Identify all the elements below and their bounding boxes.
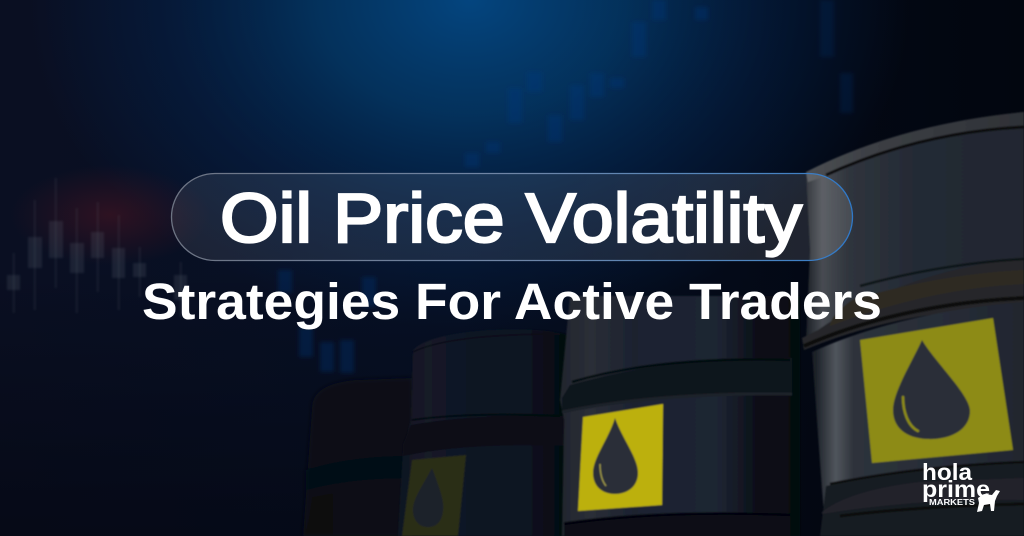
icon: label with oil drop small barrel [402,455,466,536]
title: Oil Price Volatility [220,179,802,257]
icon: label with oil drop middle barrel [578,404,663,511]
candlestick chart: red left [7,178,187,317]
logo: hola prime markets: prime [922,476,990,502]
small barrel [398,330,568,536]
large barrel [802,112,1024,536]
icon: bull [977,490,1000,512]
logo: hola prime markets: hola [922,459,972,485]
far barrel [303,378,412,536]
candlestick chart: blue lower [278,270,376,373]
middle barrel [560,296,800,536]
logo: hola prime markets: MARKETS [929,498,976,507]
icon: label with oil drop large barrel [860,318,1013,463]
title pill [172,174,852,260]
candlestick chart: blue rising [465,0,853,167]
subtitle: Strategies For Active Traders [142,273,882,330]
logo: hola prime markets [922,459,1000,512]
